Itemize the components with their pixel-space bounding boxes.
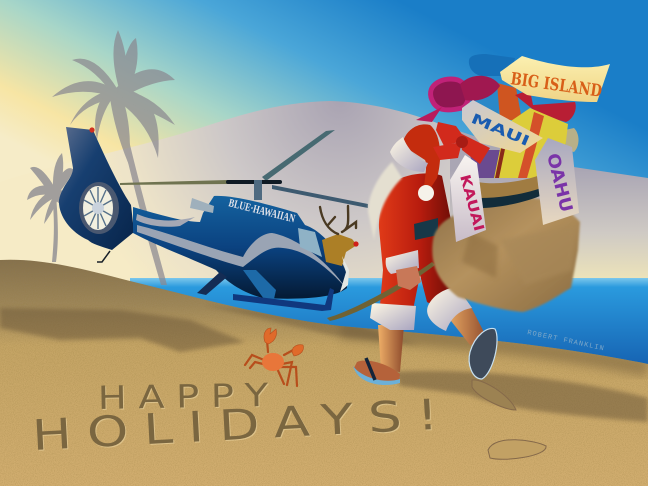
santa shadow bbox=[395, 371, 648, 422]
ocean bbox=[130, 278, 648, 370]
sleeve cuff bbox=[386, 250, 419, 274]
hat trim bbox=[390, 137, 428, 172]
magenta ribbon loops bbox=[416, 76, 500, 122]
beard bbox=[368, 162, 402, 240]
red bow bbox=[433, 122, 490, 164]
drawstring band bbox=[479, 188, 541, 208]
santa bbox=[353, 124, 497, 385]
rim of sack at back bbox=[565, 128, 578, 152]
sack collar bbox=[478, 172, 548, 200]
back leg and flip-flop sole bbox=[444, 305, 488, 345]
tail light bbox=[89, 127, 95, 133]
tag: Kauai: KAUAI bbox=[456, 173, 487, 233]
purple gift bbox=[468, 150, 505, 178]
blue gift bbox=[469, 54, 515, 76]
sand writing: HAPPY bbox=[98, 378, 270, 418]
helicopter shadow bbox=[220, 306, 411, 344]
yellow gift bbox=[494, 108, 568, 178]
windshield bbox=[340, 256, 349, 292]
footprints bbox=[472, 380, 546, 459]
tail fan bbox=[79, 182, 119, 234]
red ribbon loops bbox=[515, 90, 576, 122]
blue box behind bbox=[470, 85, 500, 130]
cabin window bbox=[298, 228, 322, 257]
palm shadows on sand bbox=[0, 308, 245, 352]
hat bbox=[402, 124, 440, 192]
fuselage body bbox=[133, 196, 347, 299]
palm tree: large bbox=[52, 30, 175, 285]
upper tail stripe bbox=[136, 214, 195, 227]
artist signature: ROBERT FRANKLIN bbox=[526, 329, 604, 353]
orange gift bbox=[497, 83, 522, 120]
helicopter name lettering: BLUE·HAWAIIAN bbox=[227, 197, 297, 225]
sack bbox=[432, 172, 580, 312]
reindeer bbox=[320, 206, 359, 266]
sand writing: HOLIDAYS! bbox=[31, 391, 439, 461]
rotor blades bbox=[120, 130, 368, 208]
front trouser cuff bbox=[370, 303, 416, 330]
sand writing: HOLIDAYS! bbox=[32, 392, 440, 462]
tag: Big Island bbox=[500, 56, 610, 102]
walking stick bbox=[327, 262, 435, 321]
tag: Maui bbox=[462, 100, 543, 153]
tag: Kauai bbox=[450, 155, 487, 242]
hat pompom bbox=[418, 185, 434, 201]
back trouser cuff bbox=[427, 288, 472, 331]
fuselage stripes bbox=[137, 225, 345, 287]
landing gear bbox=[197, 270, 334, 311]
tag: Oahu: OAHU bbox=[542, 151, 576, 214]
tag: Maui: MAUI bbox=[468, 111, 532, 150]
belt bbox=[414, 218, 438, 240]
tag: Oahu bbox=[535, 138, 579, 225]
gifts bbox=[416, 54, 578, 178]
sand writing: HAPPY bbox=[97, 377, 269, 417]
tail fin and fan housing bbox=[59, 127, 134, 250]
tag: Big Island: BIG ISLAND bbox=[509, 69, 603, 102]
red coat and trousers bbox=[379, 173, 460, 310]
front leg bbox=[378, 325, 404, 372]
sand beach bbox=[0, 255, 648, 486]
palm tree: small bbox=[27, 153, 74, 262]
helicopter bbox=[59, 127, 368, 311]
exhaust bbox=[190, 198, 214, 213]
crab bbox=[245, 328, 303, 386]
santa hand bbox=[396, 266, 421, 290]
front sandal bbox=[353, 358, 400, 385]
mountain bbox=[0, 101, 648, 290]
tail skid bbox=[97, 251, 110, 262]
